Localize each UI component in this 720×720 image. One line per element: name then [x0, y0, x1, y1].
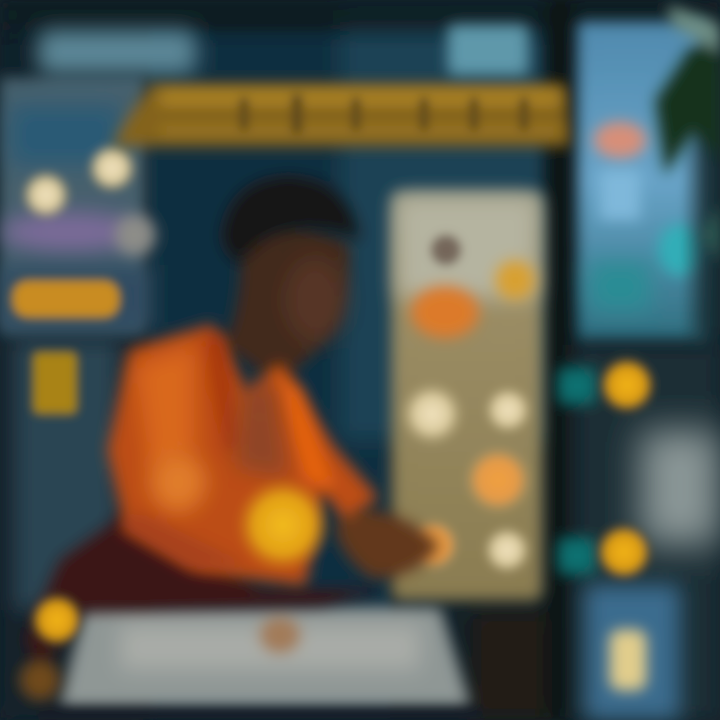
- amber dot 1: [595, 353, 659, 417]
- laptop keyboard: [40, 608, 480, 720]
- left panel dots: [20, 142, 155, 255]
- cream tile: [610, 630, 646, 690]
- teal tab 2: [558, 538, 596, 574]
- forearm hand: [335, 509, 440, 578]
- right light-blue panel: [578, 22, 720, 340]
- amber dot 2: [592, 520, 656, 584]
- banner light tile: [448, 25, 528, 75]
- lower-left amber glow: [20, 660, 60, 700]
- gold title banner: [112, 25, 570, 146]
- amber tile: [33, 352, 77, 414]
- phone avatar: [411, 235, 535, 338]
- chest shade: [235, 378, 288, 478]
- phone panel: [392, 192, 542, 600]
- foliage: [655, 5, 720, 262]
- dark trousers: [25, 510, 380, 670]
- left lower column: [14, 340, 119, 610]
- neck and face: [225, 229, 350, 385]
- teal tab 1: [558, 368, 596, 404]
- left info panel: [0, 30, 196, 333]
- person: [25, 176, 440, 670]
- banner text blocks: [240, 95, 528, 133]
- left panel heading: [38, 30, 196, 74]
- right lower column: [558, 345, 720, 720]
- dark vertical pillar: [546, 0, 574, 720]
- hair: [222, 176, 360, 262]
- orange shirt: [108, 325, 378, 585]
- left panel amber button: [12, 280, 120, 318]
- gold coin: [235, 477, 331, 573]
- phone buttons: [398, 380, 534, 576]
- lower-left amber dot: [27, 590, 87, 650]
